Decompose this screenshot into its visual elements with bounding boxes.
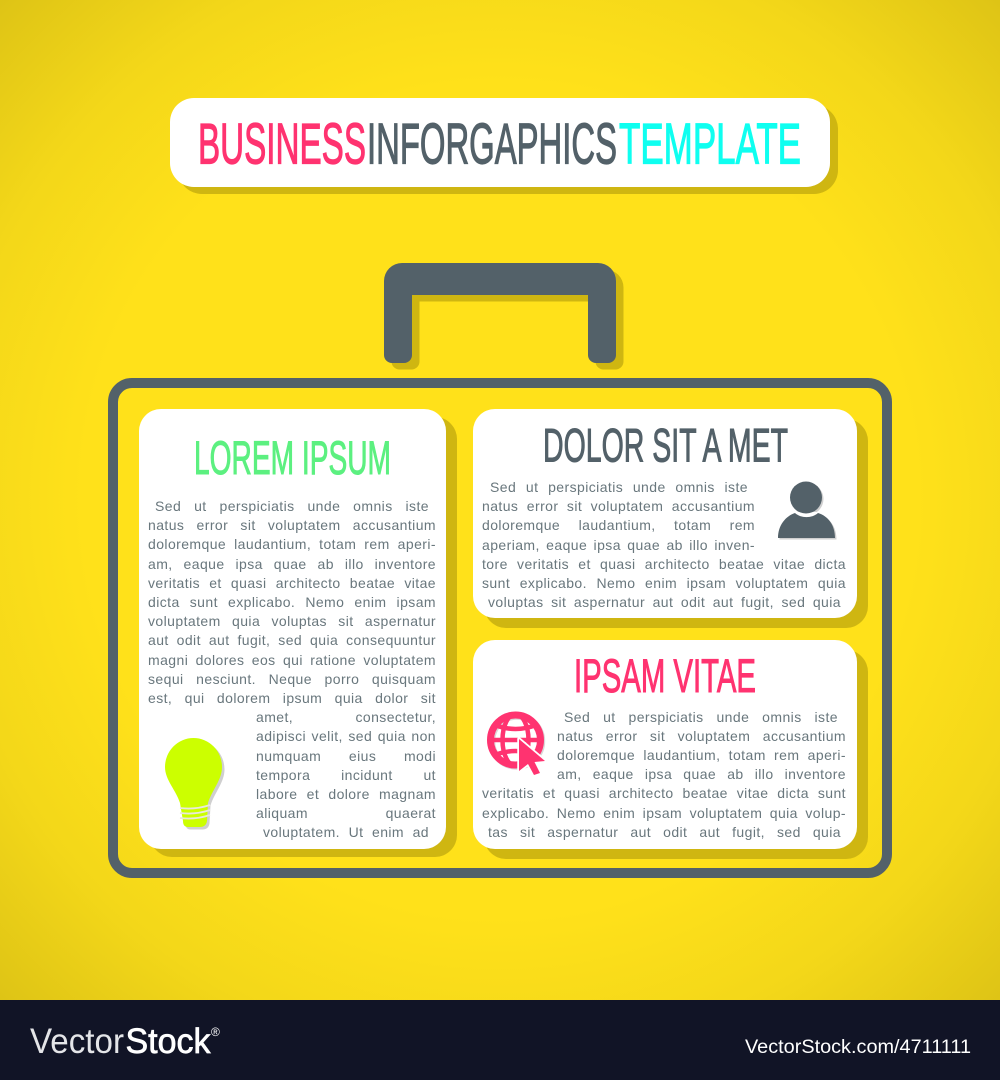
title banner xyxy=(170,98,838,194)
text block: lorem ipsum body: est, qui dolorem ipsum quia dolor sit xyxy=(148,690,436,706)
footer logo: ® xyxy=(211,1025,220,1039)
icon: light bulb xyxy=(165,738,224,830)
briefcase handle xyxy=(384,263,624,370)
text block: dolor sit a met body xyxy=(482,479,846,610)
panel: lorem ipsum xyxy=(139,409,457,857)
briefcase body frame xyxy=(108,378,892,878)
panel: dolor sit a met xyxy=(473,409,868,628)
footer image id: VectorStock.com/4711111 xyxy=(745,1036,971,1058)
text block: dolor sit a met body: tore veritatis et quasi architecto beatae vitae dicta xyxy=(482,556,846,572)
text block: lorem ipsum body: tempora incidunt ut xyxy=(256,767,436,783)
text block: lorem ipsum body: natus error sit voluptatem accusantium xyxy=(148,517,436,533)
text block: dolor sit a met body: sunt explicabo. Nemo enim ipsam voluptatem quia xyxy=(482,575,846,591)
footer logo xyxy=(30,1022,220,1061)
text block: lorem ipsum body: am, eaque ipsa quae ab illo inventore xyxy=(148,556,436,572)
text block: dolor sit a met body: Sed ut perspiciatis unde omnis iste xyxy=(490,479,748,495)
text block: lorem ipsum body: veritatis et quasi architecto beatae vitae xyxy=(148,575,436,591)
text block: ipsam vitae body: doloremque laudantium, totam rem aperi- xyxy=(557,747,846,763)
text block: lorem ipsum body: numquam eius modi xyxy=(256,748,436,764)
text block: dolor sit a met body: voluptas sit aspernatur aut odit aut fugit, sed quia xyxy=(488,594,841,610)
title text: INFORGAPHICS xyxy=(367,112,617,176)
text block: dolor sit a met body: aperiam, eaque ipsa quae ab illo inven- xyxy=(482,537,755,553)
text block: lorem ipsum body: aut odit aut fugit, sed quia consequuntur xyxy=(148,632,436,648)
text block: lorem ipsum body: amet, consectetur, xyxy=(256,709,436,725)
text block: ipsam vitae body: am, eaque ipsa quae ab illo inventore xyxy=(557,766,846,782)
text block: lorem ipsum body: voluptatem. Ut enim ad xyxy=(263,824,429,840)
text block: lorem ipsum body: sequi nesciunt. Neque porro quisquam xyxy=(148,671,436,687)
text block: dolor sit a met body: doloremque laudantium, totam rem xyxy=(482,517,755,533)
text block: lorem ipsum body: labore et dolore magnam xyxy=(256,786,436,802)
title text: BUSINESS xyxy=(198,112,366,176)
heading: lorem ipsum: LOREM IPSUM xyxy=(194,431,391,484)
text block: lorem ipsum body: Sed ut perspiciatis unde omnis iste xyxy=(155,498,429,514)
icon: person xyxy=(778,482,836,540)
text block: lorem ipsum body: magni dolores eos qui ratione voluptatem xyxy=(148,652,436,668)
footer logo: Stock xyxy=(126,1022,211,1061)
text block: ipsam vitae body: veritatis et quasi architecto beatae vitae dicta sunt xyxy=(482,785,846,801)
text block: lorem ipsum body: aliquam quaerat xyxy=(256,805,436,821)
text block: ipsam vitae body: tas sit aspernatur aut odit aut fugit, sed quia xyxy=(488,824,841,840)
text block: lorem ipsum body: adipisci velit, sed quia non xyxy=(256,728,436,744)
icon: globe with cursor xyxy=(487,712,546,775)
text block: dolor sit a met body: natus error sit voluptatem accusantium xyxy=(482,498,755,514)
text block: lorem ipsum body: dicta sunt explicabo. Nemo enim ipsam xyxy=(148,594,436,610)
panel: ipsam vitae xyxy=(473,640,868,859)
footer logo: Vector xyxy=(30,1022,124,1061)
footer bar xyxy=(0,1000,1000,1080)
text block: ipsam vitae body xyxy=(482,708,846,840)
text block: lorem ipsum body xyxy=(148,498,436,840)
title text: TEMPLATE xyxy=(619,112,801,176)
heading: ipsam vitae: IPSAM VITAE xyxy=(574,650,756,703)
text block: ipsam vitae body: explicabo. Nemo enim ipsam voluptatem quia volup- xyxy=(482,804,846,820)
text block: ipsam vitae body: Sed ut perspiciatis unde omnis iste xyxy=(564,708,838,724)
heading: dolor sit a met: DOLOR SIT A MET xyxy=(543,420,788,472)
text block: lorem ipsum body: doloremque laudantium, totam rem aperi- xyxy=(148,536,436,552)
text block: lorem ipsum body: voluptatem quia voluptas sit aspernatur xyxy=(148,613,436,629)
text block: ipsam vitae body: natus error sit voluptatem accusantium xyxy=(557,728,846,744)
